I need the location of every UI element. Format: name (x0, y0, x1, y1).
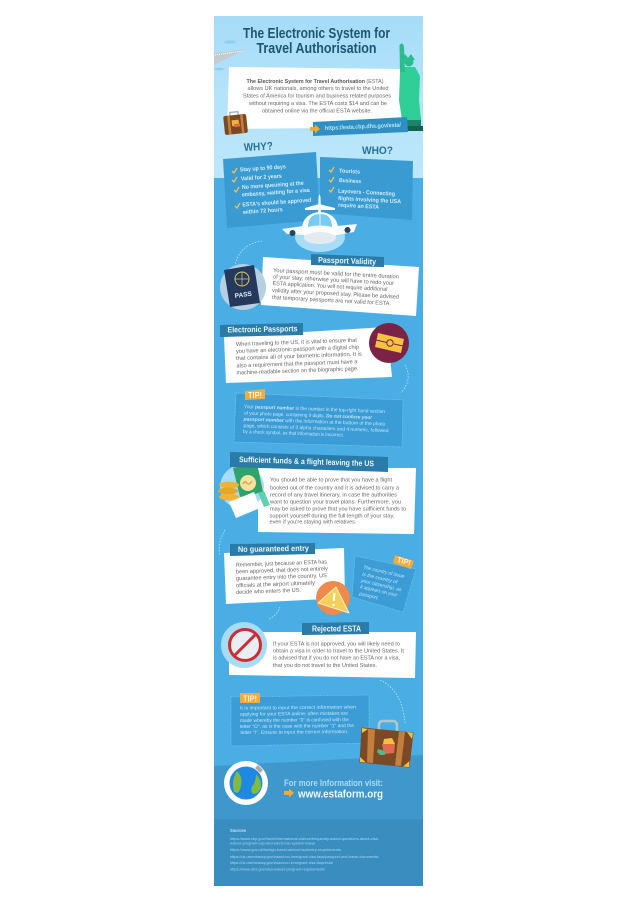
panel: passport validity (261, 254, 419, 316)
panel: sufficient funds: want to question your travel plans. Furthermore, you (269, 500, 401, 506)
heading: electronic passports (220, 323, 303, 337)
panel: who list (320, 157, 413, 220)
link banner: https://esta.cbp.dhs.gov/esta/ (325, 123, 401, 132)
panel: sufficient funds: record of any travel itinerary, in case the authorities (270, 493, 397, 499)
panel: sufficient funds: You should be able to prove that you have a flight (270, 478, 392, 484)
panel: why list: Valid for 2 years (241, 174, 282, 182)
panel: no guaranteed entry: decide who enters the US. (236, 588, 301, 596)
callout: tip country of issue: your citizenship, as (360, 578, 402, 593)
panel: who list: flights involving the USA (338, 196, 401, 205)
heading: electronic passports: Electronic Passports (227, 324, 298, 334)
panel: why list: within 72 hours (242, 207, 283, 216)
panel: electronic passports: machine-readable section on the biographic page. (236, 366, 359, 376)
panel: introduction: without requiring a visa. The ESTA costs $14 and can be (248, 101, 387, 107)
callout: tip country of issue: The country of issue (363, 565, 405, 580)
panel: who list: require an ESTA (338, 203, 379, 211)
heading: who: WHO? (362, 145, 393, 157)
heading: sufficient funds: Sufficient funds & a flight leaving the US (239, 455, 375, 468)
panel: passport validity: ESTA application. You will not require additional (272, 281, 388, 293)
icon: chip (369, 323, 409, 363)
sources: https://www.gov.uk/foreign-travel-advice/usa/entry-requirements (230, 848, 341, 852)
panel: rejected esta (229, 632, 416, 678)
title: The Electronic System for (243, 26, 390, 42)
icon: small suitcase (223, 111, 248, 135)
panel: introduction: States of America for tourism and business related purposes (243, 94, 391, 100)
callout: tip passport number: of your photo page, containing 9 digits. Do not confuse your (244, 411, 373, 421)
tip badge (245, 389, 265, 400)
panel: rejected esta: is advised that if you do not have an ESTA nor a visa, (273, 656, 400, 662)
heading: rejected esta: Rejected ESTA (312, 624, 361, 634)
panel: introduction (227, 67, 408, 129)
panel: rejected esta: If your ESTA is not approved, you will likely need to (273, 642, 400, 648)
heading: why: WHY? (244, 140, 273, 154)
tip badge: TIP! (243, 694, 257, 704)
panel: sufficient funds: may be asked to prove that you have sufficient funds to (270, 506, 406, 512)
callout: tip country of issue: passport. (358, 591, 379, 601)
heading: rejected esta (302, 622, 369, 635)
panel: introduction: The Electronic System for Travel Authorisation (ESTA) (246, 79, 384, 85)
call to action: For more Information visit: (284, 778, 383, 788)
panel: electronic passports (220, 323, 392, 383)
callout: tip correct information: made whereby the number "0" is confused with the (240, 717, 349, 724)
panel: rejected esta: that you do not travel to the United States. (273, 663, 377, 669)
panel: passport validity: of your stay, otherwise you will have to redo your (273, 275, 394, 287)
icon: passport: PASS (234, 291, 253, 300)
icon: statue of liberty (399, 43, 423, 131)
sources: https://uk.usembassy.gov/visas/non-immigrant-visa-faqs/esta/ (230, 861, 333, 865)
callout: tip correct information: It is important to input the correct information when (240, 704, 356, 711)
callout: tip correct information: letter "O", as is the case with the number "1" and the (240, 723, 354, 730)
panel: why list: embassy, waiting for a visa (242, 188, 311, 198)
title (243, 26, 390, 57)
tip badge: TIP! (396, 555, 412, 568)
panel: no guaranteed entry: Remember, just because an ESTA has (236, 560, 327, 569)
callout: tip correct information (231, 693, 369, 746)
panel: introduction: allows UK nationals, among others to travel to the United (248, 86, 388, 92)
tip badge: TIP! (248, 391, 262, 400)
panel: electronic passports: When traveling to the US, it is vital to ensure that (236, 338, 357, 348)
panel: no guaranteed entry: officials at the airport ultimately (236, 581, 315, 589)
panel: who list: Layovers - Connecting (338, 189, 396, 198)
panel: no guaranteed entry (224, 543, 345, 604)
call to action (284, 778, 383, 800)
panel: electronic passports: that contains all of your biometric information. It is (236, 352, 362, 362)
heading: sufficient funds (230, 452, 388, 472)
dotted flight path (219, 241, 408, 723)
icon: money and ticket (218, 463, 270, 518)
icon: passport (220, 264, 266, 310)
callout: tip country of issue (352, 555, 416, 612)
panel: electronic passports: you have an electronic passport with a digital chip (236, 345, 359, 355)
sources: https://www.cbp.gov/travel/international-visitors/frequently-asked-questions-about-visa- (230, 837, 379, 841)
callout: tip correct information: applying for your ESTA online; often mistakes are (240, 711, 348, 718)
panel: no guaranteed entry: been approved, that does not entirely (236, 566, 328, 575)
panel: passport validity: validity after your proposed stay. Please be advised (272, 288, 399, 301)
call to action: www.estaform.org (297, 788, 383, 800)
sources: https://www.dhs.gov/visa-waiver-program-requirements (230, 868, 325, 872)
sources: Sources (230, 828, 246, 833)
panel: sufficient funds (258, 468, 416, 534)
panel: introduction: obtained online via the official ESTA website. (262, 109, 372, 115)
sources (230, 828, 379, 872)
panel: why list (223, 152, 320, 228)
callout: tip country of issue: it appears on your (360, 584, 398, 599)
icon: globe (224, 761, 268, 805)
icon: large suitcase (360, 721, 413, 767)
heading: no guaranteed entry: No guaranteed entry (238, 544, 310, 554)
callout: tip correct information: letter "I". Ensure to input the correct information. (240, 729, 349, 736)
panel: why list: Stay up to 90 days (240, 164, 286, 173)
panel: who list: Tourists (339, 169, 360, 176)
sources: https://uk.usembassy.gov/visas/non-immigrant-visa-faqs/passport-and-travel-documents/ (230, 855, 379, 859)
background panel (214, 16, 423, 886)
callout: tip passport number: Your passport number is the number in the top-right hand section (244, 404, 385, 415)
icon: prohibited sign (221, 622, 267, 668)
heading: passport validity: Passport Validity (318, 256, 377, 267)
panel: no guaranteed entry: guarantee entry into the country. US (236, 573, 327, 582)
panel: passport validity: that temporary passports are not valid for ESTA. (272, 295, 391, 307)
callout: tip country of issue: is the country of (362, 572, 399, 586)
panel: sufficient funds: even if you're staying with relatives. (270, 520, 357, 526)
panel: sufficient funds: booked out of the country and it is advised to carry a (270, 486, 400, 492)
callout: tip passport number: page, which consists of 3 alpha characters and 4 numeric, followed (243, 423, 389, 434)
icon: airplane (282, 194, 357, 252)
callout: tip passport number (234, 389, 403, 447)
panel: why list: No more queueing at the (242, 181, 304, 191)
panel: sufficient funds: support yourself during the full length of your stay, (270, 513, 395, 519)
sources: waiver-program-esp-and-electronic-system-travel (230, 842, 315, 846)
callout: tip passport number: passport number with the information at the bottom of the photo (242, 416, 386, 427)
panel: rejected esta: obtain a visa in order to travel to the United States. It (273, 648, 404, 654)
panel: why list: ESTA's should be approved (242, 198, 312, 208)
panel: electronic passports: also a requirement that the passport must have a (236, 359, 358, 369)
title: Travel Authorisation (256, 41, 376, 57)
panel: who list: Business (339, 178, 361, 185)
icon: warning (316, 581, 350, 615)
panel: passport validity: Your passport must be valid for the entire duration (273, 268, 399, 281)
callout: tip passport number: by a check symbol, as that information is incorrect. (243, 429, 344, 439)
link banner (310, 117, 408, 136)
